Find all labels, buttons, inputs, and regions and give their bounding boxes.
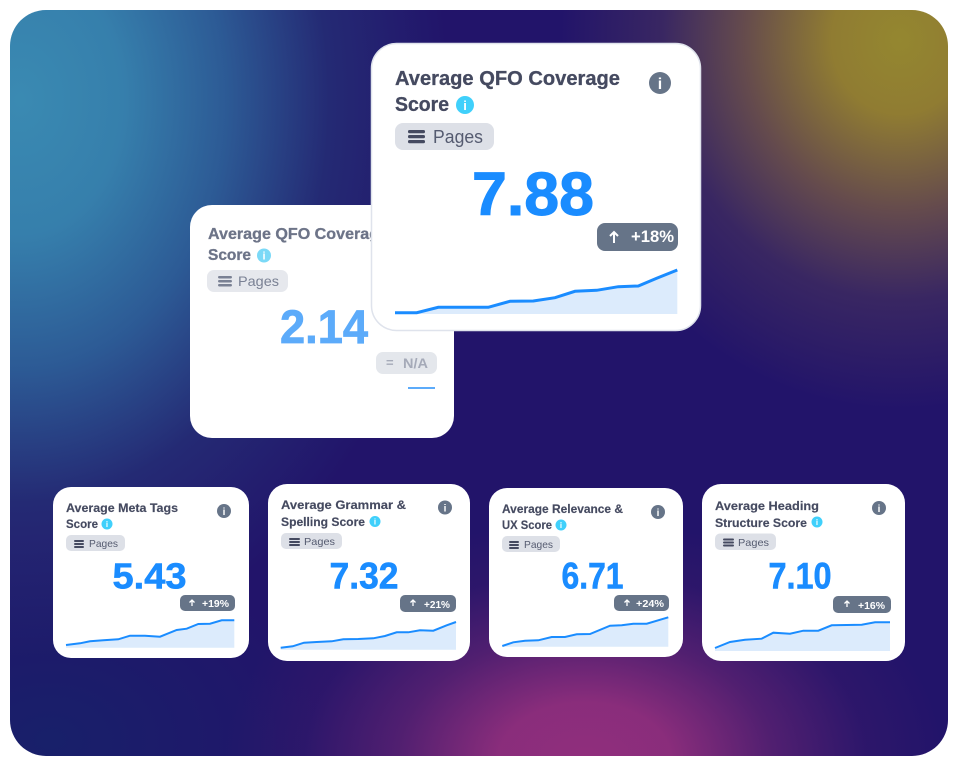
icon: cyan info: i bbox=[106, 520, 108, 529]
pill: faded pages: Pages bbox=[238, 273, 279, 289]
value: 7.88: 7.88 bbox=[472, 160, 594, 228]
title: faded card: Average QFO Coverage bbox=[208, 226, 388, 243]
value: 7.32: 7.32 bbox=[330, 556, 398, 596]
badge: +16%: +16% bbox=[858, 600, 886, 612]
badge: +21%: +21% bbox=[424, 599, 451, 611]
title: meta tags: Average Meta Tags bbox=[66, 503, 178, 515]
title: heading structure: Average Heading bbox=[715, 499, 819, 513]
title: main card: Average QFO Coverage bbox=[395, 68, 620, 90]
icon: gray info bbox=[438, 500, 452, 514]
value: 2.14: 2.14 bbox=[280, 300, 368, 353]
title: grammar and spelling: Spelling Score bbox=[281, 515, 365, 529]
badge: N/A bbox=[376, 352, 437, 374]
card: main QFO coverage score bbox=[372, 44, 700, 330]
card: faded QFO coverage score bbox=[190, 205, 454, 438]
pill: pages: Pages bbox=[304, 536, 335, 548]
pill: pages: Pages bbox=[738, 537, 769, 549]
icon: gray info bbox=[872, 501, 886, 515]
sparkline: grammar bbox=[281, 622, 456, 650]
title: heading structure: Structure Score bbox=[715, 516, 807, 530]
badge: +19%: +19% bbox=[202, 599, 229, 610]
icon: gray info bbox=[649, 72, 671, 94]
badge: +21% bbox=[400, 595, 456, 612]
pill: pages: Pages bbox=[433, 127, 483, 147]
sparkline: meta tags bbox=[66, 620, 234, 648]
title: heading structure bbox=[715, 499, 819, 530]
card: grammar and spelling score bbox=[268, 484, 470, 661]
title: relevance and UX: UX Score bbox=[502, 520, 552, 532]
icon: faded info: i bbox=[262, 250, 266, 262]
title: relevance and UX: Average Relevance & bbox=[502, 504, 623, 516]
pill: pages bbox=[66, 535, 125, 551]
pill: faded pages bbox=[207, 270, 288, 292]
title: faded card bbox=[208, 226, 388, 264]
pill: pages bbox=[502, 536, 560, 552]
title: grammar and spelling: Average Grammar & bbox=[281, 498, 406, 512]
pill: pages bbox=[395, 123, 494, 150]
icon: gray info: i bbox=[444, 504, 447, 514]
icon: cyan info: i bbox=[560, 521, 562, 530]
icon: gray info: i bbox=[878, 504, 881, 515]
badge: +18% bbox=[597, 223, 678, 251]
icon: cyan info: i bbox=[374, 518, 376, 526]
badge: N/A: = bbox=[386, 355, 394, 370]
badge: +18%: +18% bbox=[631, 227, 674, 246]
icon: gray info bbox=[651, 505, 665, 519]
badge: +19% bbox=[180, 595, 235, 611]
pill: pages: Pages bbox=[524, 539, 553, 551]
sparkline: heading bbox=[715, 622, 890, 651]
pill: pages bbox=[281, 533, 342, 549]
badge: N/A: N/A bbox=[403, 355, 428, 371]
card: meta tags score bbox=[53, 487, 249, 658]
pill: pages: Pages bbox=[89, 538, 118, 550]
icon: cyan info: i bbox=[816, 518, 818, 527]
icon: cyan info bbox=[370, 516, 380, 527]
title: meta tags bbox=[66, 503, 178, 531]
icon: cyan info bbox=[812, 516, 822, 528]
value: 5.43: 5.43 bbox=[112, 556, 186, 596]
icon: faded info bbox=[257, 248, 271, 262]
value: 6.71: 6.71 bbox=[562, 556, 624, 596]
card: heading structure score bbox=[702, 484, 905, 661]
title: main card: Score bbox=[395, 94, 449, 116]
value: 7.10: 7.10 bbox=[768, 556, 832, 596]
badge: +24%: +24% bbox=[636, 598, 665, 610]
icon: cyan info: i bbox=[463, 98, 467, 113]
pill: pages bbox=[715, 534, 776, 550]
sparkline: main card bbox=[395, 270, 677, 314]
title: faded card: Score bbox=[208, 247, 251, 264]
icon: gray info: i bbox=[223, 507, 226, 518]
icon: gray info bbox=[217, 504, 231, 518]
title: grammar and spelling bbox=[281, 498, 406, 529]
card: relevance and UX score bbox=[489, 488, 683, 657]
icon: gray info: i bbox=[657, 508, 660, 519]
icon: cyan info bbox=[556, 520, 566, 530]
badge: +16% bbox=[833, 596, 891, 613]
title: meta tags: Score bbox=[66, 519, 98, 531]
title: relevance and UX bbox=[502, 504, 623, 532]
sparkline: relevance bbox=[502, 617, 668, 647]
icon: gray info: i bbox=[658, 76, 662, 93]
icon: cyan info bbox=[102, 518, 112, 530]
sparkline: faded flat bbox=[408, 387, 435, 389]
badge: +24% bbox=[614, 595, 669, 611]
title: main card bbox=[395, 68, 620, 116]
icon: cyan info bbox=[456, 96, 474, 114]
